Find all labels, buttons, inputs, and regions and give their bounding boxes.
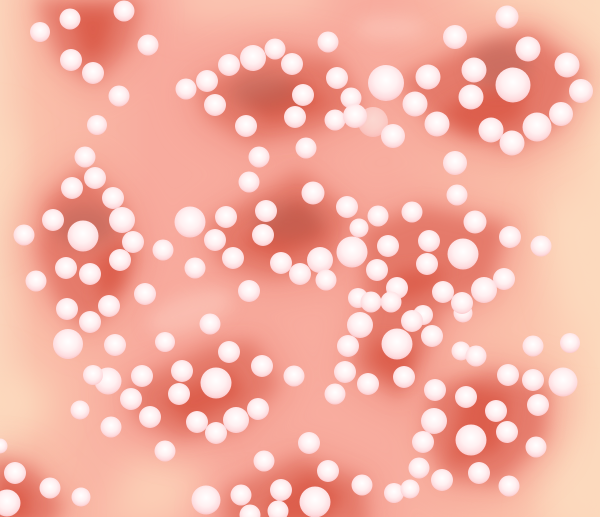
blisters: top-left cluster xyxy=(30,0,158,135)
blisters: bottom-left cluster xyxy=(0,438,90,516)
brown shading in blotches xyxy=(53,41,530,245)
blisters: bottom cluster xyxy=(192,432,372,517)
blisters: middle cluster xyxy=(134,172,358,305)
blisters: left cluster xyxy=(14,146,144,359)
blisters: top-center cluster xyxy=(176,32,388,168)
faint pale patches xyxy=(142,16,425,344)
blisters: lower-right cluster xyxy=(384,333,580,503)
blisters: lower-left cluster xyxy=(70,314,304,462)
blisters: top-right cluster xyxy=(368,6,593,175)
blisters: center-right cluster xyxy=(324,184,552,404)
